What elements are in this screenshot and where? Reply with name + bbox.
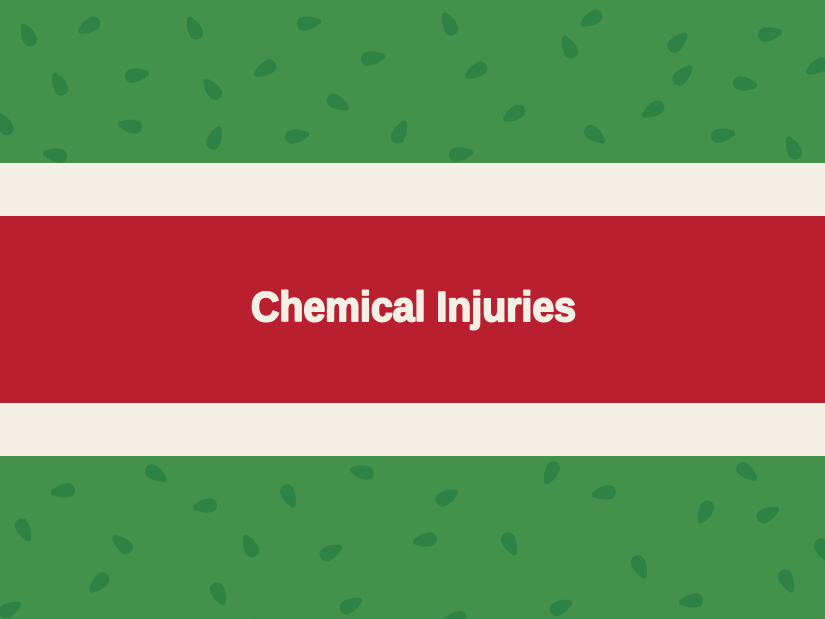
- red title band: [0, 216, 825, 403]
- bottom seed pattern: [0, 459, 825, 619]
- title: Chemical Injuries: [251, 283, 576, 330]
- bottom cream band: [0, 403, 825, 456]
- top seed pattern: [0, 7, 825, 164]
- top cream band: [0, 163, 825, 216]
